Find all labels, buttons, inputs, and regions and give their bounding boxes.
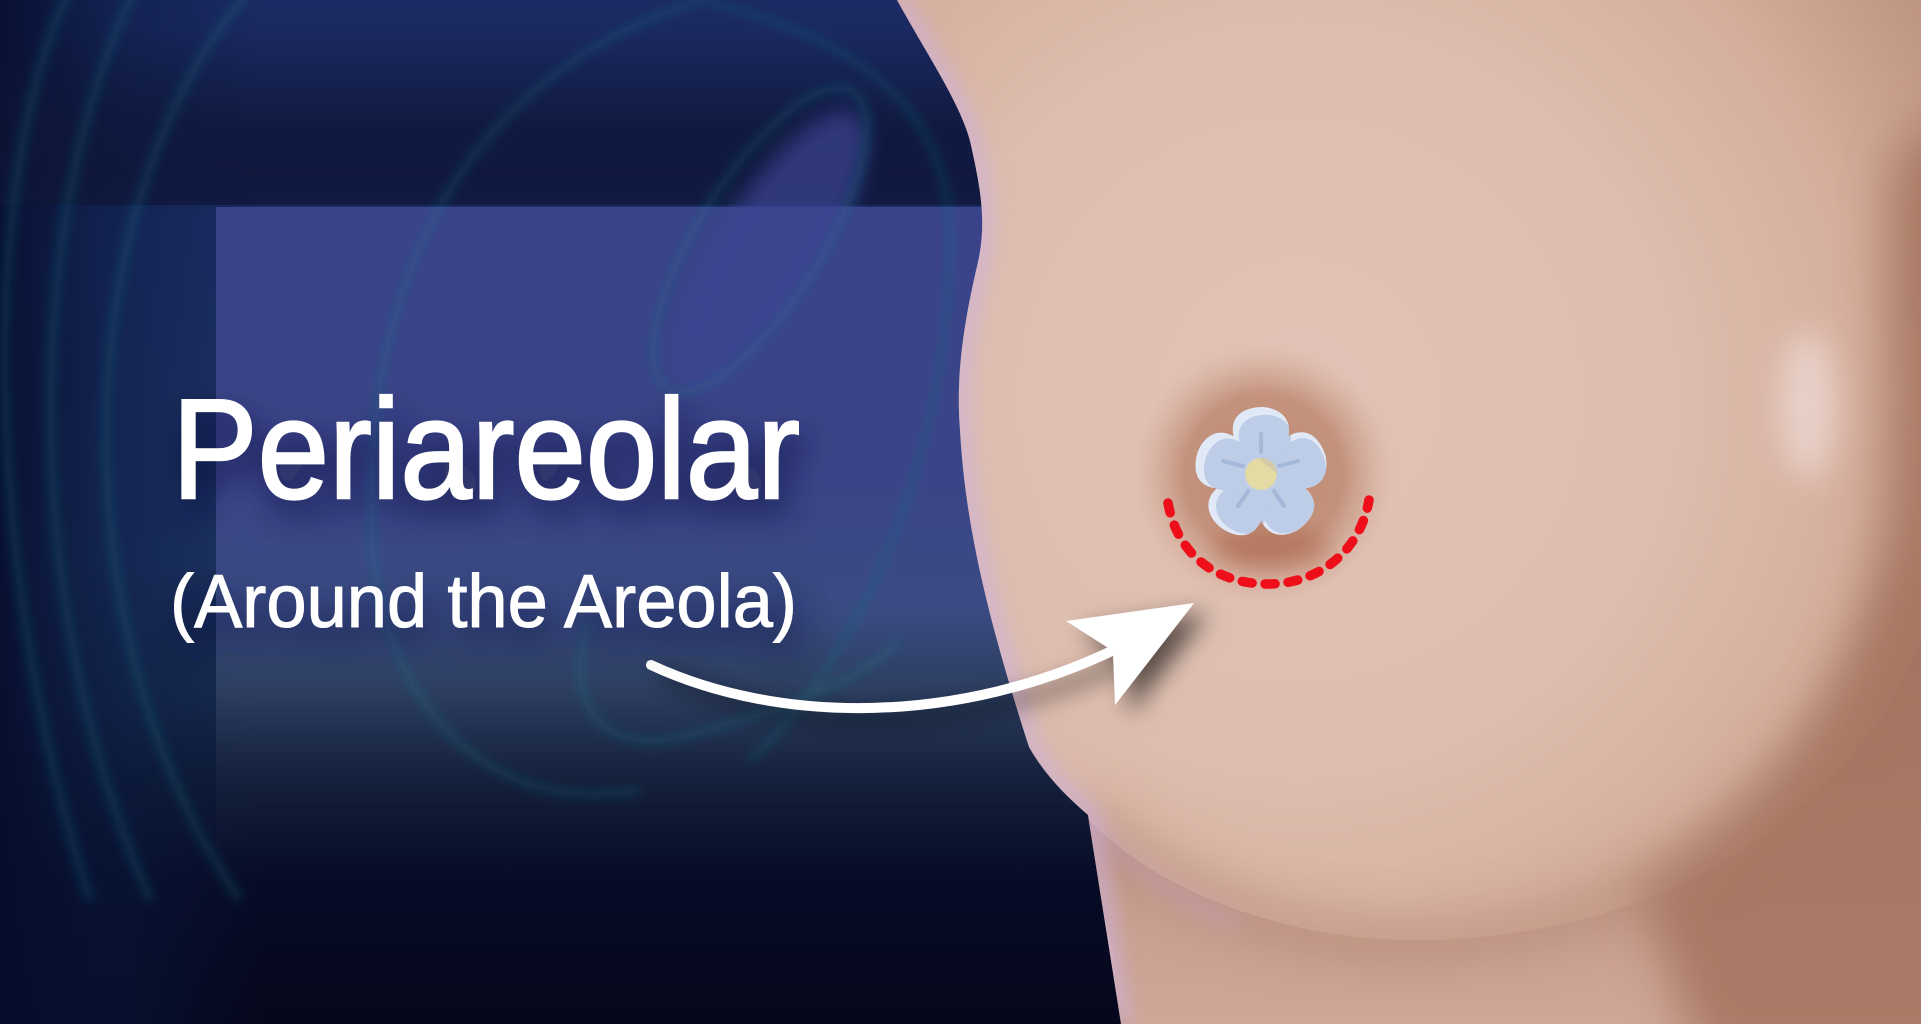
arrow pointing to incision (651, 603, 1194, 708)
left lavender rim (897, 0, 1121, 1024)
right side shadow (1640, 90, 1921, 1024)
under-breast shadow (1100, 770, 1773, 965)
subtitle: (Around the Areola) (170, 559, 797, 643)
title: Periareolar (172, 370, 800, 529)
skin base (897, 0, 1921, 1024)
red dashed incision line (1168, 500, 1369, 584)
side highlight (1780, 330, 1836, 480)
flower icon (1195, 407, 1326, 536)
teal concentric arcs (5, 0, 950, 900)
areola (1132, 342, 1396, 606)
lower-breast lavender reflection (1100, 832, 1240, 930)
lower torso (1088, 820, 1714, 1024)
body and breast illustration (897, 0, 1921, 1024)
